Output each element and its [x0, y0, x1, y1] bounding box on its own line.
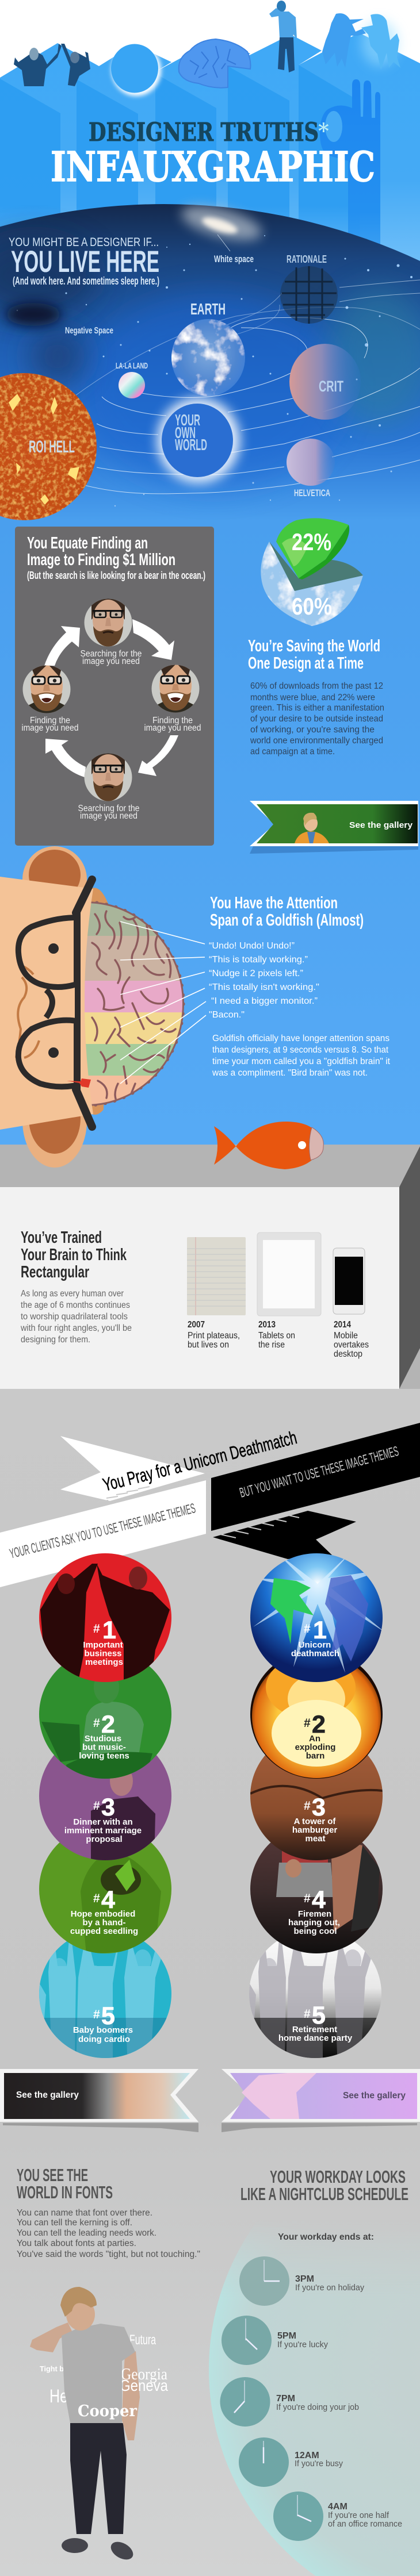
- client theme labels: 2: [101, 1711, 115, 1738]
- illustration: designer head with brain: [0, 846, 206, 1168]
- heading: finding an image: You Equate Finding an: [27, 534, 148, 552]
- media timeline labels: 2007: [188, 1320, 205, 1330]
- clock: 3PM: [239, 2256, 364, 2306]
- ribbon: see the gallery unicorn: [222, 2069, 420, 2132]
- client theme labels: #: [93, 1622, 100, 1636]
- designer theme labels: 1: [313, 1617, 327, 1644]
- planet labels: ROI HELL: [29, 437, 75, 456]
- media timeline labels: Print plateaus,: [188, 1331, 240, 1341]
- icon: unicorn silhouettes: [322, 13, 400, 70]
- designer theme labels: barn: [306, 1751, 324, 1761]
- clock: 12AM: 12AM: [295, 2451, 319, 2460]
- client theme labels: Hope embodied: [71, 1909, 135, 1919]
- cycle labels: image you need: [80, 811, 138, 821]
- planet: your own world: [157, 398, 240, 483]
- client theme labels: 5: [101, 2002, 115, 2030]
- designer theme labels: hamburger: [292, 1825, 337, 1835]
- pie values: 22%: [292, 528, 331, 555]
- body copy: [20, 1289, 132, 1345]
- t-shirt: [62, 2324, 135, 2423]
- client theme labels: Studious: [85, 1734, 121, 1744]
- clock: 7PM: If you're doing your job: [276, 2402, 359, 2412]
- heading: you see the world in fonts: [17, 2165, 113, 2202]
- brain quotes: “This totally isn't working.": [209, 982, 319, 992]
- goldfish copy: was a compliment. "Bird brain" was not.: [212, 1068, 368, 1078]
- text: saving the world: One Design at a Time: [248, 654, 364, 673]
- planet labels: WORLD: [175, 436, 207, 454]
- designer theme labels: hanging out,: [288, 1918, 340, 1928]
- icon: notebook paper: [187, 1237, 246, 1315]
- leader lines: [120, 922, 206, 1084]
- media timeline labels: 2013: [258, 1320, 276, 1330]
- designer theme labels: 5: [312, 2002, 326, 2029]
- white flag: [60, 1436, 205, 1502]
- clock: 7PM: [220, 2377, 359, 2427]
- designer theme labels: 4: [312, 1886, 326, 1914]
- text: attention span: [209, 894, 391, 1078]
- banner: unicorn deathmatch: [0, 1423, 420, 1587]
- ribbon: see the gallery handshake: See the gallery: [16, 2090, 79, 2100]
- icon: brain: [179, 39, 250, 88]
- clock: 4AM: 4AM: [328, 2502, 348, 2512]
- client theme labels: 4: [101, 1886, 115, 1914]
- cycle labels: image you need: [144, 723, 201, 733]
- body copy: with four right angles, you'll be: [20, 1323, 132, 1333]
- panel: designer universe: [0, 199, 420, 520]
- clock: 12AM: If you're busy: [295, 2459, 343, 2468]
- heading: finding an image: (But the search is like looking for a bear in the ocean.): [27, 570, 205, 581]
- planet: earth: [171, 319, 245, 396]
- decorative teal moon: [209, 2248, 420, 2576]
- body copy: months were blue, and 22% were: [250, 693, 375, 702]
- heading: trained your brain: You’ve Trained: [21, 1229, 102, 1247]
- theme 1: unicorn deathmatch: [250, 1553, 383, 1682]
- planet labels: Negative Space: [65, 326, 113, 336]
- head: [60, 2287, 97, 2331]
- media timeline labels: Tablets on: [258, 1331, 295, 1341]
- designer theme labels: 3: [312, 1794, 326, 1821]
- cycle labels: image you need: [82, 657, 140, 666]
- text: font habits: You can name that font over there.: [17, 2208, 152, 2218]
- glasses: [18, 880, 92, 1127]
- planet labels: LA-LA LAND: [116, 361, 148, 371]
- negative space blotch: [6, 303, 61, 326]
- font names behind shirt: Futura: [129, 2332, 156, 2348]
- heading: trained your brain: Your Brain to Think: [21, 1246, 127, 1264]
- planet: la-la land: [119, 372, 145, 398]
- heading: you live here: YOU MIGHT BE A DESIGNER IF...: [9, 236, 159, 249]
- body copy: [250, 681, 384, 757]
- clock: 7PM: 7PM: [276, 2394, 295, 2404]
- icon: eclipse: [111, 44, 161, 96]
- orbit lines: [51, 280, 420, 494]
- icon: goldfish: [214, 1122, 323, 1169]
- galaxy: white space: [178, 199, 265, 251]
- brain quotes: "Bacon.": [209, 1010, 245, 1020]
- title: [51, 118, 375, 191]
- client theme labels: Dinner with an: [73, 1817, 133, 1827]
- font names behind shirt: He: [49, 2386, 68, 2406]
- banner: unicorn deathmatch: You Pray for a Unicorn Deathmatch: [101, 1427, 299, 1495]
- media timeline labels: the rise: [258, 1340, 285, 1350]
- client theme labels: business: [84, 1649, 122, 1659]
- ribbon: see the gallery handshake: [0, 2069, 198, 2132]
- photo: hiker: [295, 813, 329, 843]
- cycle labels: image you need: [22, 723, 78, 733]
- heading: workday nightclub schedule: [240, 2167, 408, 2242]
- heading: trained your brain: Rectangular: [21, 1263, 89, 1281]
- planet labels: CRIT: [319, 378, 343, 395]
- brain quotes: “Undo! Undo! Undo!”: [209, 941, 295, 951]
- brain quotes: “Nudge it 2 pixels left.”: [209, 969, 303, 978]
- designer theme labels: #: [304, 1892, 311, 1905]
- font names behind shirt: [40, 2332, 168, 2406]
- chart: globe pie: [261, 518, 363, 626]
- cycle labels: Searching for the: [78, 804, 139, 813]
- client theme labels: but music-: [82, 1742, 126, 1752]
- clock: 12AM: [239, 2437, 343, 2487]
- band: your clients: [0, 1480, 206, 1587]
- media timeline labels: desktop: [334, 1349, 362, 1359]
- text: font habits: [17, 2208, 200, 2259]
- heading: you live here: YOU LIVE HERE: [11, 245, 159, 279]
- clock: 5PM: If you're lucky: [277, 2340, 328, 2350]
- ear top: [22, 846, 87, 913]
- icon: man on peak: [269, 1, 297, 72]
- theme 2: studious teens: [39, 1666, 171, 1779]
- heading: trained your brain: [21, 1229, 127, 1281]
- planet: rationale: [280, 266, 338, 324]
- planet labels: White space: [214, 254, 254, 264]
- client theme labels: #: [93, 1717, 100, 1730]
- heading: finding an image: Image to Finding $1 Million: [27, 551, 175, 569]
- designer theme labels: [278, 1617, 353, 2043]
- cycle labels: Finding the: [152, 716, 193, 725]
- designer theme labels: #: [304, 1622, 311, 1636]
- cycle labels: [22, 649, 201, 821]
- face: searching bottom: [84, 753, 132, 801]
- planet: helvetica: [287, 439, 335, 486]
- designer theme labels: Firemen: [298, 1909, 331, 1919]
- theme 4: seedling: [39, 1842, 171, 1953]
- planet labels: OWN: [175, 424, 196, 442]
- goldfish copy: [212, 1034, 391, 1078]
- text: attention span: You Have the Attention: [210, 894, 338, 912]
- client theme labels: #: [93, 2008, 100, 2021]
- planet: crit: [289, 344, 361, 420]
- font names behind shirt: Georgia: [121, 2366, 168, 2383]
- cycle arrows: [44, 619, 178, 777]
- theme 2: exploding barn: [250, 1666, 383, 1779]
- designer theme labels: 2: [312, 1711, 326, 1738]
- band: you want: [211, 1423, 420, 1531]
- cycle labels: Searching for the: [81, 649, 142, 659]
- icon: tablet: [257, 1233, 321, 1316]
- font names behind shirt: Geneva: [120, 2377, 168, 2394]
- client theme labels: by a hand-: [82, 1918, 126, 1928]
- panel: image search cycle: [15, 527, 214, 846]
- brain: [85, 901, 185, 1107]
- client theme labels: #: [93, 1799, 100, 1813]
- planet labels: RATIONALE: [287, 254, 327, 265]
- heading: workday nightclub schedule: Your workday ends at:: [278, 2232, 374, 2242]
- font names behind shirt: Tight b: [40, 2364, 64, 2373]
- clock: 3PM: 3PM: [295, 2274, 314, 2284]
- body copy: 60% of downloads from the past 12: [250, 681, 383, 691]
- body copy: of your desire to be outside instead: [250, 714, 383, 724]
- client theme labels: #: [93, 1892, 100, 1905]
- client theme labels: 3: [101, 1794, 115, 1821]
- designer theme labels: #: [304, 2007, 311, 2021]
- body copy: As long as every human over: [21, 1289, 124, 1299]
- hero mountains: [0, 33, 420, 299]
- client theme labels: proposal: [86, 1834, 123, 1844]
- pencil mark: [67, 1078, 91, 1088]
- body copy: to worship quadrilateral tools: [21, 1312, 128, 1322]
- media timeline labels: overtakes: [334, 1340, 369, 1350]
- heading: you see the world in fonts: YOU SEE THE: [17, 2165, 88, 2185]
- band: your clients: YOUR CLIENTS ASK YOU TO USE THESE IMAGE THEMES: [8, 1500, 197, 1562]
- clock: 4AM: of an office romance: [328, 2519, 402, 2529]
- icon: OK hand: [320, 79, 380, 299]
- media timeline labels: 2014: [334, 1320, 351, 1330]
- client theme labels: meetings: [85, 1657, 123, 1667]
- text: font habits: You've said the words "tight, but not touching.": [17, 2249, 200, 2259]
- brain quotes: “I need a bigger monitor.”: [211, 996, 318, 1006]
- text: font habits: You talk about fonts at parties.: [17, 2239, 136, 2248]
- brain quotes: [209, 941, 319, 1020]
- text: saving the world: [248, 637, 384, 757]
- clock: 3PM: If you're on holiday: [295, 2283, 364, 2293]
- planet labels: EARTH: [190, 300, 226, 318]
- goldfish copy: time your mom called you a "goldfish brain" it: [212, 1057, 391, 1066]
- text: font habits: You can tell the kerning is off.: [17, 2218, 132, 2228]
- ribbon: see the gallery forest: See the gallery: [349, 820, 413, 830]
- goldfish copy: than designers, at 9 seconds versus 8. So that: [212, 1045, 389, 1055]
- raised arm: [30, 2322, 72, 2352]
- pie values: 60%: [292, 593, 332, 620]
- designer theme labels: #: [304, 1799, 311, 1813]
- designer theme labels: being cool: [293, 1926, 337, 1936]
- figure: man with fonts: [30, 2287, 168, 2563]
- designer theme labels: home dance party: [278, 2033, 353, 2043]
- icon: phone: [333, 1248, 365, 1314]
- nose and brows: [16, 966, 39, 1058]
- client theme labels: imminent marriage: [64, 1826, 142, 1836]
- body copy: green. This is either a manifestation: [250, 703, 384, 713]
- title: DESIGNER TRUTHS: [89, 118, 319, 147]
- clock: 5PM: [222, 2316, 328, 2365]
- designer theme labels: A tower of: [294, 1817, 336, 1826]
- body copy: ad campaign at a time.: [250, 747, 335, 757]
- face: searching top: [84, 598, 132, 647]
- client theme labels: loving teens: [79, 1751, 129, 1761]
- media timeline labels: [188, 1320, 369, 1359]
- body copy: world one environmentally charged: [250, 736, 383, 746]
- theme 3: marriage proposal: [39, 1755, 171, 1860]
- theme 3: hamburger tower: [250, 1755, 383, 1860]
- designer theme labels: #: [304, 1717, 311, 1730]
- panel: rectangular brain: [0, 1146, 420, 1389]
- designer theme labels: Retirement: [292, 2025, 337, 2034]
- media timeline labels: but lives on: [188, 1340, 229, 1350]
- designer theme labels: exploding: [295, 1742, 335, 1752]
- face: finding right: [151, 665, 200, 713]
- planet: ROI hell: [0, 373, 97, 520]
- right arm: [122, 2351, 140, 2440]
- planet labels: HELVETICA: [294, 487, 330, 498]
- skull rim: [83, 888, 108, 1115]
- face skin: [0, 877, 93, 1130]
- stars: [17, 235, 413, 506]
- client theme labels: [64, 1617, 142, 2044]
- ribbon: see the gallery forest: [250, 801, 418, 854]
- client theme labels: Baby boomers: [73, 2025, 133, 2035]
- clock: 5PM: 5PM: [277, 2331, 296, 2341]
- ear bottom: [22, 1074, 87, 1168]
- planet labels: YOUR: [175, 411, 200, 429]
- figure: man with fonts: Cooper: [78, 2402, 138, 2420]
- text: font habits: You can tell the leading needs work.: [17, 2228, 156, 2238]
- media timeline labels: Mobile: [334, 1331, 358, 1341]
- goldfish copy: Goldfish officially have longer attention spans: [212, 1034, 390, 1043]
- pie values: [292, 528, 332, 620]
- face: finding left: [22, 665, 71, 713]
- theme 4: firemen: [250, 1842, 383, 1953]
- designer theme labels: deathmatch: [291, 1649, 339, 1659]
- column: client image themes: [39, 1553, 171, 2058]
- theme 1: business meetings: [39, 1553, 171, 1682]
- heading: finding an image: [27, 534, 205, 581]
- title: *: [318, 119, 329, 143]
- ribbon: see the gallery unicorn: See the gallery: [343, 2091, 406, 2101]
- planet labels: [29, 254, 343, 498]
- theme 5: retirement dance party: [249, 1941, 381, 2058]
- body copy: of working, or you're saving the: [250, 725, 375, 735]
- black flag: [213, 1511, 356, 1559]
- clock: 4AM: If you're one half: [328, 2510, 390, 2520]
- client theme labels: Important: [83, 1640, 123, 1650]
- brain quotes: “This is totally working.”: [209, 955, 308, 965]
- designer theme labels: An: [309, 1734, 320, 1744]
- client theme labels: cupped seedling: [70, 1926, 138, 1936]
- eyes: [48, 943, 59, 1058]
- heading: you live here: (And work here. And sometimes sleep here.): [13, 275, 159, 287]
- clock: 4AM: [273, 2491, 402, 2541]
- heading: you live here: [9, 236, 159, 287]
- legs: [70, 2423, 127, 2534]
- blue nebula: [0, 236, 420, 489]
- body copy: the age of 6 months continues: [21, 1300, 130, 1310]
- body copy: designing for them.: [21, 1335, 90, 1345]
- cycle labels: Finding the: [30, 716, 70, 725]
- designer theme labels: meat: [305, 1834, 326, 1844]
- heading: you see the world in fonts: WORLD IN FONTS: [17, 2182, 113, 2202]
- icon: unicorn head: [242, 2073, 316, 2119]
- column: designer image themes: [249, 1553, 383, 2058]
- designer theme labels: Unicorn: [299, 1640, 331, 1650]
- client theme labels: 1: [102, 1617, 116, 1644]
- socks: [62, 2538, 136, 2563]
- icon: business couple: [14, 44, 90, 86]
- theme 5: baby boomers: [39, 1941, 171, 2058]
- client theme labels: doing cardio: [78, 2034, 130, 2044]
